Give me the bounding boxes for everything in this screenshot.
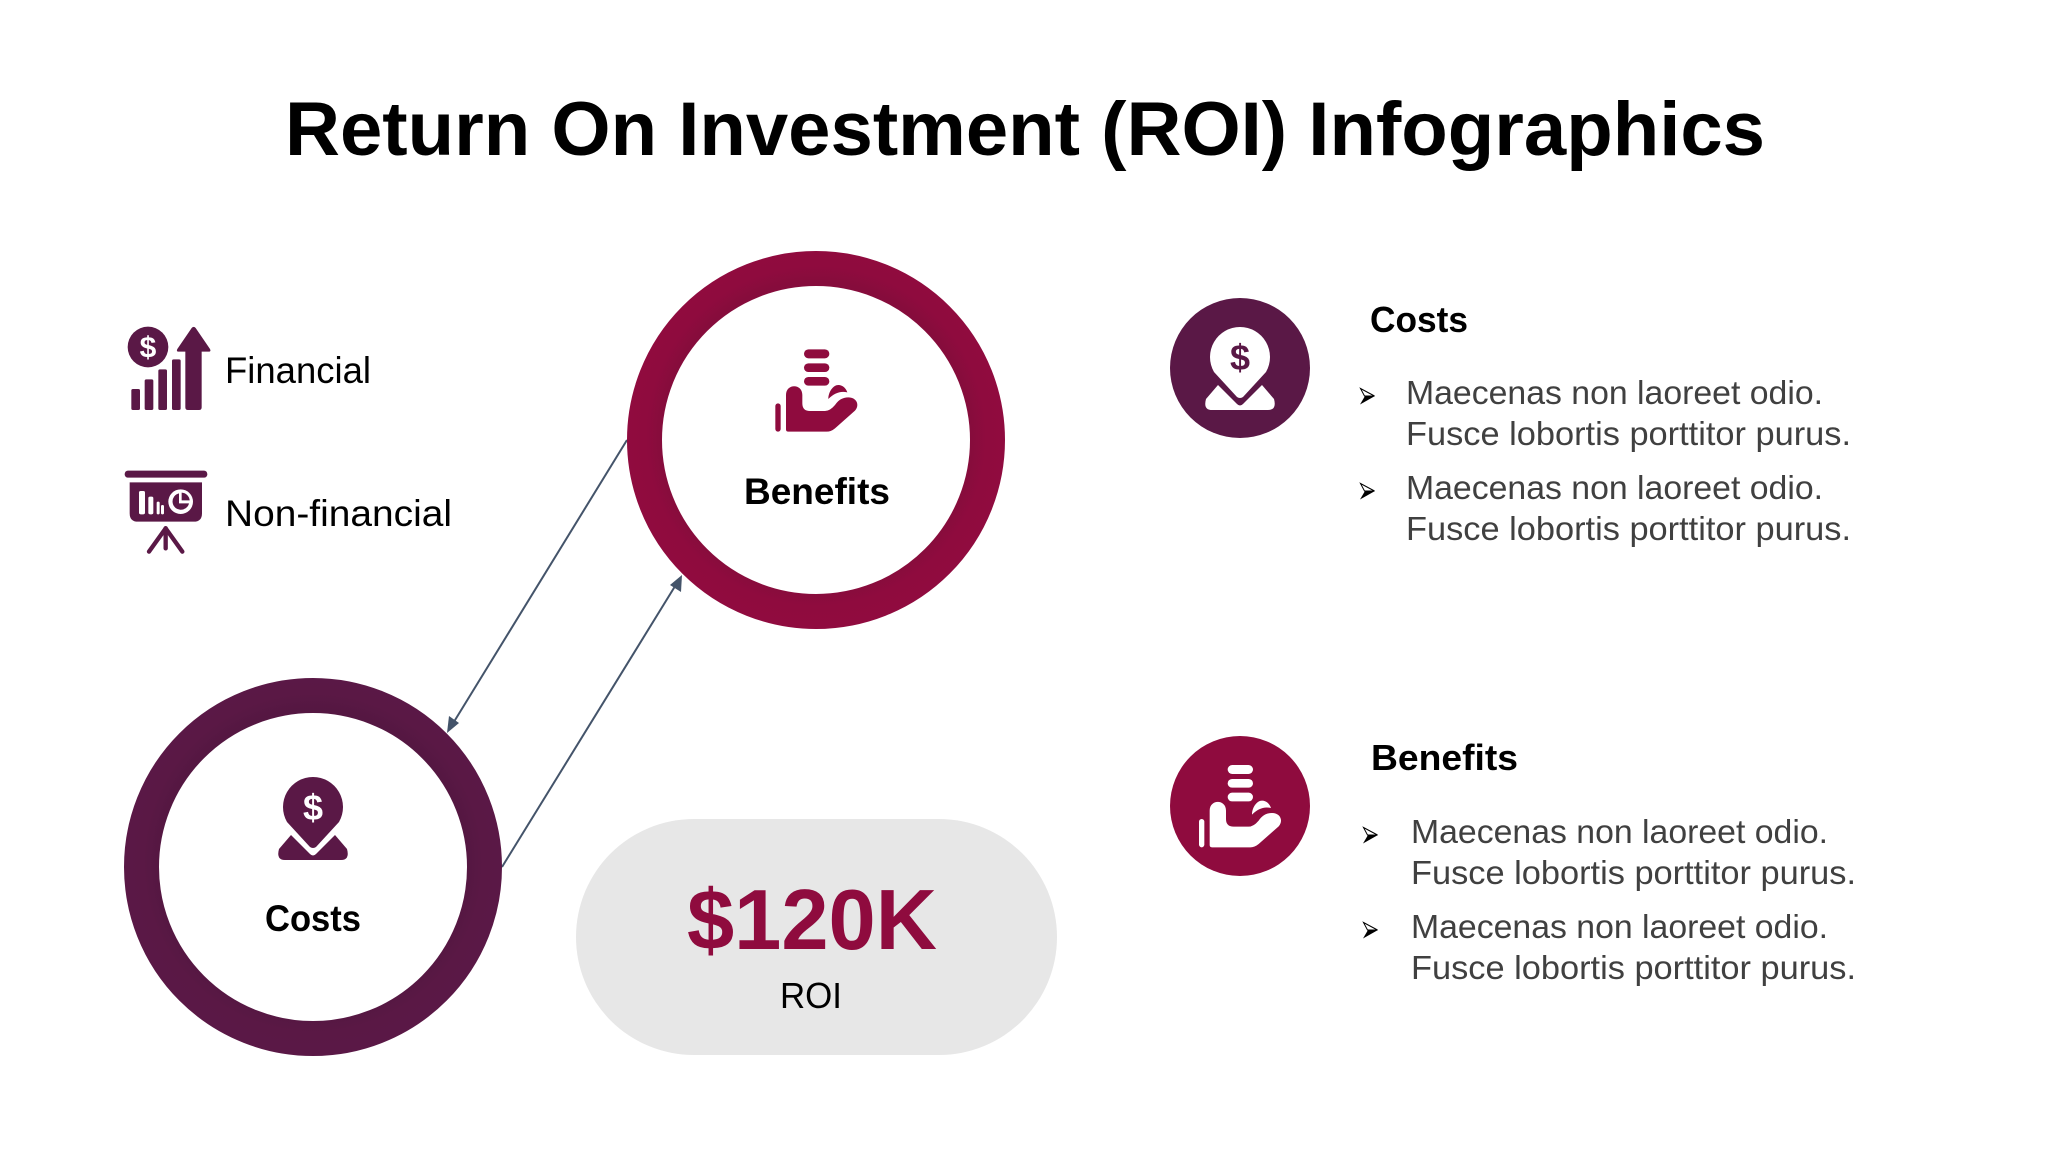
heading: costs: Costs xyxy=(1370,299,1468,340)
bullet text 3: Fusce lobortis porttitor purus. xyxy=(1411,854,1856,891)
icon: location pin with dollar xyxy=(278,777,348,860)
bullet text 4: Maecenas non laoreet odio. xyxy=(1411,908,1828,945)
legend: non-financial xyxy=(125,471,452,552)
bullet text 3 xyxy=(1411,813,1856,891)
ROI callout pill xyxy=(576,819,1057,1055)
legend: financial xyxy=(128,327,371,410)
icon: presentation board xyxy=(125,471,207,552)
bullet marker 3 xyxy=(1363,828,1378,844)
bullet text 2: Fusce lobortis porttitor purus. xyxy=(1406,510,1851,547)
title: Return On Investment (ROI) Infographics xyxy=(285,87,1765,172)
bullet text 1: Fusce lobortis porttitor purus. xyxy=(1406,415,1851,452)
bullet marker 4 xyxy=(1363,922,1378,938)
icon: financial growth xyxy=(128,327,210,410)
arrow: costs to benefits xyxy=(502,575,682,867)
panel: benefits details xyxy=(1170,736,1856,986)
bullet text 1: Maecenas non laoreet odio. xyxy=(1406,374,1823,411)
ring: benefits xyxy=(644,268,988,612)
bullet text 4: Fusce lobortis porttitor purus. xyxy=(1411,949,1856,986)
bullet text 2: Maecenas non laoreet odio. xyxy=(1406,469,1823,506)
arrow: benefits to costs xyxy=(447,440,627,733)
label: benefits: Benefits xyxy=(744,471,890,512)
ROI label: ROI xyxy=(780,975,842,1016)
bullet text 1 xyxy=(1406,374,1851,452)
ROI value: $120K xyxy=(687,873,937,968)
heading: benefits: Benefits xyxy=(1371,737,1518,778)
label: costs: Costs xyxy=(265,898,361,939)
bullet text 2 xyxy=(1406,469,1851,547)
icon: financial growth: $ xyxy=(140,331,157,364)
icon: location pin with dollar: $ xyxy=(303,787,323,828)
panel: costs details xyxy=(1170,298,1851,547)
icon: benefits badge xyxy=(1170,736,1310,876)
icon: hand with coins xyxy=(775,349,857,432)
label: financial: Financial xyxy=(225,350,371,391)
icon: costs badge xyxy=(1170,298,1310,438)
bullet marker 1 xyxy=(1360,388,1375,404)
bullet marker 2 xyxy=(1360,484,1375,500)
label: non-financial: Non-financial xyxy=(225,493,452,534)
bullet text 4 xyxy=(1411,908,1856,986)
icon: costs badge: $ xyxy=(1230,337,1250,378)
ring: costs xyxy=(142,696,484,1038)
bullet text 3: Maecenas non laoreet odio. xyxy=(1411,813,1828,850)
